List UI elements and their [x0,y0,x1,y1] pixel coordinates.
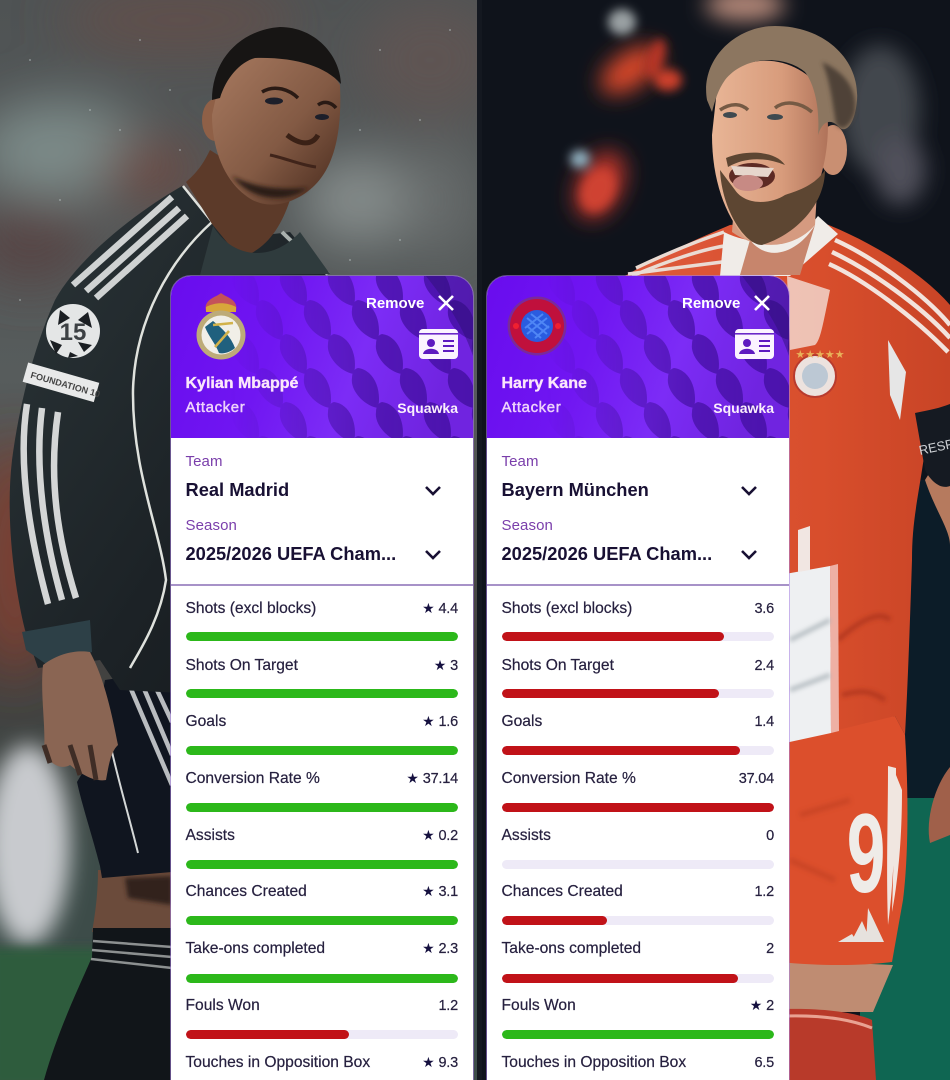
mouth tongue [729,163,775,189]
text: position: Attacker [502,399,561,416]
hair [706,26,857,135]
icon: Real Madrid crest [196,293,246,360]
stat: Touches in Opposition Box [502,1054,774,1071]
stat: Assists [185,827,458,869]
stat: Conversion Rate %: 37.04 [739,771,774,787]
stat: Fouls Won: Fouls Won [502,997,576,1014]
arm skin [925,475,950,544]
stat: Take-ons completed: 2 [766,941,774,957]
sleeve cuff [22,620,92,664]
shorts [780,716,907,965]
stat: Goals: Goals [502,713,542,730]
stat: Assists: Assists [502,827,551,844]
text: season label: Season [186,517,237,534]
icon: team chevron [741,486,757,496]
head [712,61,828,242]
leg [785,960,893,1012]
icon: season chevron [425,550,441,560]
rain speckles [19,29,451,301]
stat: Goals [186,713,458,755]
stat: Assists: 0 [766,828,774,844]
icon: close X [438,295,454,311]
body folds [838,616,890,700]
icon: close X [754,295,770,311]
stat: Take-ons completed [502,940,774,983]
stat: Goals: ★ 1.6 [422,714,458,730]
stat: Touches in Opposition Box [186,1054,458,1071]
stat: Touches in Opposition Box: Touches in Opposition Box [502,1054,686,1071]
thigh [92,870,172,932]
Mbappé figure [10,27,345,1080]
text: team label: Team [186,453,223,470]
stat: Fouls Won: Fouls Won [186,997,260,1014]
stat: Chances Created: 1.2 [754,884,774,900]
ear [819,125,847,175]
sleeve stripes [24,404,76,604]
Mbappé figure: 15 [60,319,86,346]
stat: Chances Created: Chances Created [186,883,307,900]
icon: ID card [735,329,774,359]
stat: Goals: 1.4 [754,714,774,730]
stat: Shots On Target: Shots On Target [502,657,614,674]
stat: Take-ons completed: Take-ons completed [186,940,325,957]
stat: Fouls Won: 1.2 [438,998,458,1014]
stat: Fouls Won [186,997,458,1039]
neck [186,150,290,258]
collar [720,216,838,276]
stat: Shots (excl blocks): Shots (excl blocks) [186,600,316,617]
shorts side stripes [887,766,902,925]
Foundation patch: FOUNDATION 10 [30,370,101,399]
header: Mbappé [171,276,473,438]
stat: Take-ons completed: Take-ons completed [502,940,641,957]
text: team label: Team [502,453,539,470]
Kane figure [625,26,950,1080]
stat: Take-ons completed: ★ 2.3 [422,941,458,957]
stat: Conversion Rate %: Conversion Rate % [186,770,320,787]
neck [732,202,816,245]
shorts number 9: 9 [847,791,885,916]
shoulder stripes [73,197,187,298]
head [212,56,340,205]
icon: team chevron [425,486,441,496]
jersey [10,186,345,700]
text: season value: 2025/2026 UEFA Cham... [186,543,396,564]
stat: Assists [501,827,774,869]
stat: Chances Created [502,883,774,925]
stat: Shots On Target: 2.4 [754,658,774,674]
stat: Shots (excl blocks) [186,600,458,641]
sock [44,928,172,1080]
stat: Chances Created: Chances Created [502,883,623,900]
shoulder stripes right [829,240,950,352]
Foundation patch [23,362,103,403]
hair [212,27,341,100]
brows eyes nose mouth [262,88,336,108]
stat: Assists: Assists [186,827,235,844]
text: player name: Kylian Mbappé [186,375,298,392]
panel: Harry Kane card [487,276,789,1080]
brows eyes [720,103,812,112]
text: player name: Harry Kane [502,375,587,392]
Bayern chest crest: ★★★★★ [795,348,845,361]
stat: Shots On Target [186,657,458,698]
adidas logo [838,908,884,942]
text: source: Squawka [713,400,774,416]
text: position: Attacker [186,399,245,416]
sleeve white insert [888,340,906,420]
piping [130,186,212,668]
shorts [77,670,172,878]
stat: Touches in Opposition Box: Touches in Opposition Box [186,1054,370,1071]
shoulder stripes left [628,232,724,276]
stat: Shots On Target: ★ 3 [434,658,458,674]
captain armband [915,404,950,487]
text: team value: Real Madrid [186,479,289,500]
text: source: Squawka [397,400,458,416]
stat: Touches in Opposition Box: ★ 9.3 [422,1055,458,1071]
white body panel [785,566,831,743]
Bayern chest crest [794,348,845,397]
text: season label: Season [502,517,553,534]
icon: ID card [419,329,458,359]
stat: Conversion Rate % [186,770,458,812]
beard [720,170,825,245]
stat: Fouls Won [502,997,774,1039]
lower right: pitch and shadow [905,480,950,798]
left background: misty stadium [0,0,500,1080]
right background: dark stadium [482,0,950,1080]
stat: Fouls Won: ★ 2 [750,998,774,1014]
header: Kane [487,276,789,438]
text: team value: Bayern München [502,479,649,500]
stat: Shots On Target: Shots On Target [186,657,298,674]
stat: Conversion Rate %: ★ 37.14 [406,771,458,787]
jersey [625,218,950,743]
panel: Kylian Mbappé card [171,276,473,1080]
stat: Shots On Target [502,657,774,698]
icon: season chevron [741,550,757,560]
stat: Goals: Goals [186,713,226,730]
stat: Shots (excl blocks) [502,600,774,641]
hand [42,651,118,780]
centre divider [477,0,482,1080]
Champions League badge 15 [46,304,100,358]
stat: Conversion Rate %: Conversion Rate % [502,770,636,787]
text: season value: 2025/2026 UEFA Cham... [502,543,712,564]
stat: Conversion Rate % [502,770,774,812]
stat: Shots (excl blocks): ★ 4.4 [422,601,458,617]
beard shading [232,176,308,198]
text: remove label: Remove [366,295,424,312]
text: remove label: Remove [682,295,740,312]
stat: Goals [502,713,774,755]
ear [202,99,216,141]
stat: Shots (excl blocks): 3.6 [754,601,774,617]
stat: Chances Created: ★ 3.1 [422,884,458,900]
stat: Take-ons completed [186,940,458,983]
stat: Assists: ★ 0.2 [422,828,458,844]
stat: Touches in Opposition Box: 6.5 [754,1055,774,1071]
stat: Shots (excl blocks): Shots (excl blocks) [502,600,632,617]
icon: Bayern München crest [508,296,566,356]
stat: Chances Created [186,883,458,925]
